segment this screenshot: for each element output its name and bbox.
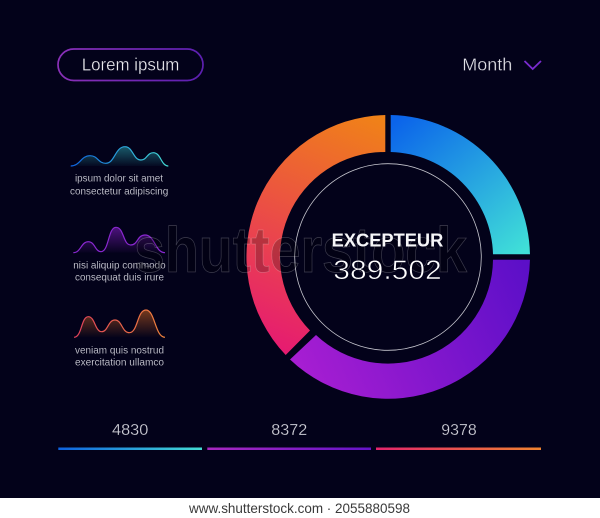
wave item 1: ipsum dolor sit amet <box>75 173 163 185</box>
wave item 3: exercitation ullamco <box>75 357 164 369</box>
wave item 3: veniam quis nostrud <box>75 344 164 356</box>
segment: purple <box>290 260 530 399</box>
wave item 1: consectetur adipiscing <box>70 185 168 197</box>
stat: 8372: 8372 <box>271 422 307 439</box>
stat: 4830: 4830 <box>112 422 149 439</box>
segment: blue <box>391 115 530 254</box>
center label: EXCEPTEUR <box>332 231 443 251</box>
wave item 2: nisi aliquip commodo <box>73 259 166 271</box>
button: Lorem ipsum: Lorem ipsum <box>82 55 179 75</box>
wave item 2 <box>73 227 166 284</box>
button: Lorem ipsum <box>58 49 203 80</box>
dropdown: Month: Month <box>462 55 512 75</box>
footer credit: www.shutterstock.com · 2055880598 <box>188 500 410 516</box>
dropdown: Month <box>462 55 541 75</box>
wave item 3 <box>74 310 165 369</box>
donut chart <box>246 115 530 399</box>
wave item 1 <box>70 147 168 197</box>
watermark: shutterstock <box>134 214 467 286</box>
segment: orange <box>246 115 385 355</box>
stat: 9378: 9378 <box>441 422 477 439</box>
wave item 2: consequat duis irure <box>75 272 164 284</box>
inner thin circle <box>295 164 481 350</box>
center value: 389.502 <box>333 255 442 285</box>
